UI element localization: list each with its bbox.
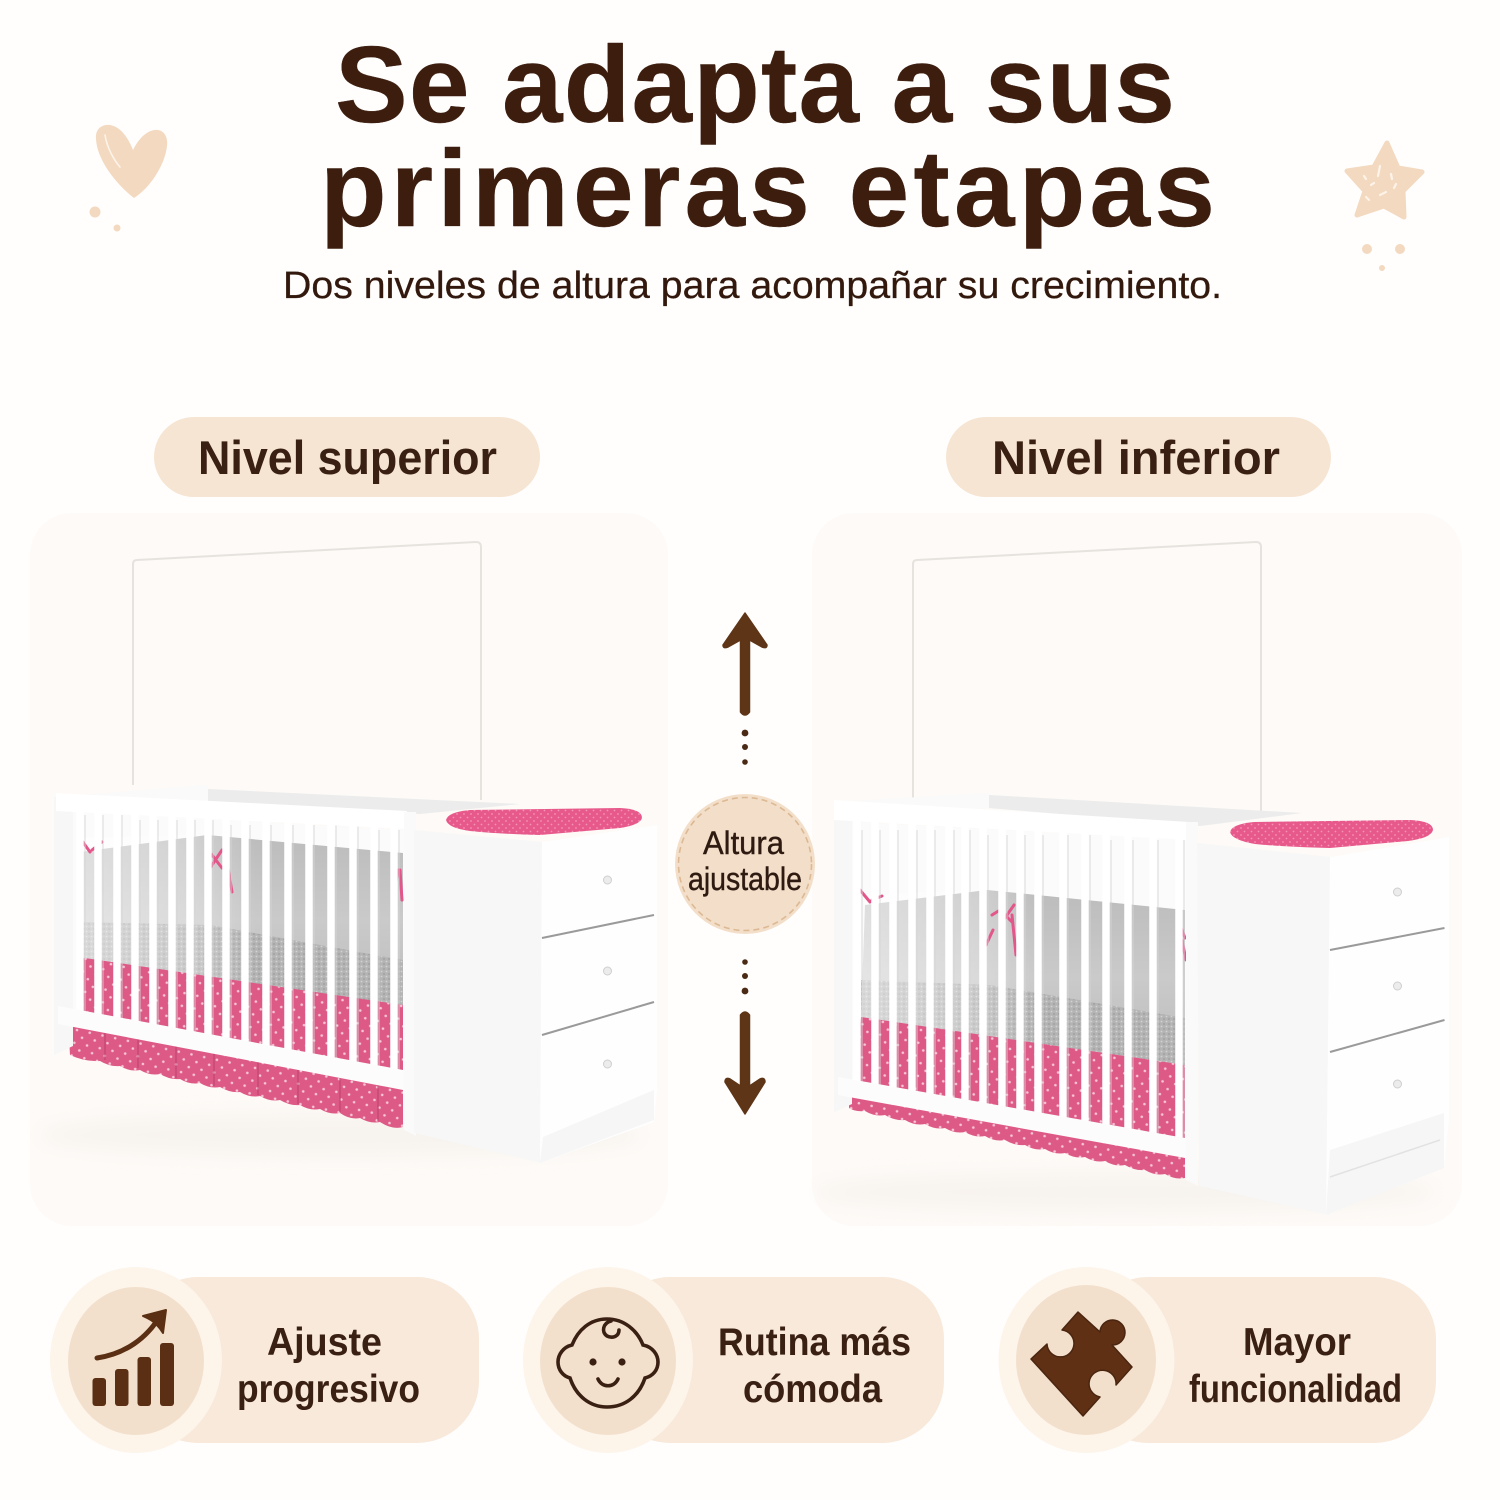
slats shadow (862, 830, 1184, 1142)
drawer unit (1197, 837, 1449, 1215)
feature: Rutina más cómoda: Rutina más (718, 1321, 911, 1364)
crib interior (72, 812, 405, 1090)
wire frame (133, 542, 481, 800)
title: Se adapta a sus (335, 24, 1175, 146)
feature: Mayor funcionalidad: Mayor (1243, 1321, 1351, 1364)
bottom rail (58, 1006, 403, 1090)
drawer unit (414, 825, 657, 1163)
changing pad (446, 808, 642, 835)
crib interior (852, 822, 1187, 1160)
lower skirt (849, 1090, 1185, 1178)
bows (860, 890, 1186, 960)
feature: Rutina más cómoda (523, 1267, 944, 1453)
icon: star decoration (1347, 143, 1422, 271)
title: primeras etapas (320, 128, 1215, 250)
icon: heart decoration (90, 125, 167, 232)
subtitle: Dos niveles de altura para acompañar su crecimiento. (283, 265, 1222, 307)
changing pad (1230, 820, 1433, 848)
badge: Altura ajustable (675, 794, 815, 934)
badge: Nivel superior: Nivel superior (198, 431, 497, 484)
icon: baby face (558, 1319, 658, 1407)
floor shadow (815, 1174, 1435, 1210)
title (320, 24, 1215, 250)
icon: puzzle piece (1031, 1312, 1132, 1416)
floor shadow (40, 1115, 640, 1155)
feature: Mayor funcionalidad: funcionalidad (1189, 1368, 1402, 1411)
back rail (208, 789, 520, 814)
back rail (989, 795, 1302, 826)
corner post (1186, 822, 1198, 1186)
panel: lower level crib (812, 513, 1462, 1226)
bottom rail (838, 1077, 1185, 1158)
left post (834, 802, 852, 1112)
badge: Altura ajustable: ajustable (688, 861, 802, 897)
bows (80, 838, 402, 905)
upper skirt (855, 1017, 1185, 1142)
arrow: up (723, 613, 767, 765)
slats (857, 812, 1179, 1142)
wire frame (913, 542, 1261, 812)
upper skirt (78, 957, 403, 1072)
badge: Nivel superior (154, 417, 540, 497)
slats shadow (85, 815, 399, 1074)
arrow: down (725, 959, 765, 1114)
feature: Ajuste progresivo: progresivo (237, 1368, 420, 1411)
bedding (861, 890, 1185, 1065)
icon: growth chart (92, 1310, 174, 1406)
left post (54, 797, 73, 1055)
feature: Mayor funcionalidad (998, 1267, 1436, 1453)
slats (80, 805, 394, 1074)
badge: Nivel inferior: Nivel inferior (992, 431, 1280, 484)
skirt folds (105, 1030, 378, 1121)
bedding (78, 835, 403, 1006)
feature: Ajuste progresivo: Ajuste (267, 1321, 382, 1364)
badge: Altura ajustable: Altura (703, 825, 784, 861)
feature: Ajuste progresivo (50, 1267, 479, 1453)
corner post (404, 812, 416, 1136)
feature: Rutina más cómoda: cómoda (743, 1368, 882, 1411)
lower skirt (68, 1020, 403, 1128)
top rail (834, 800, 1189, 840)
badge: Nivel inferior (946, 417, 1331, 497)
panel: upper level crib (30, 513, 668, 1226)
top rail (56, 793, 407, 829)
